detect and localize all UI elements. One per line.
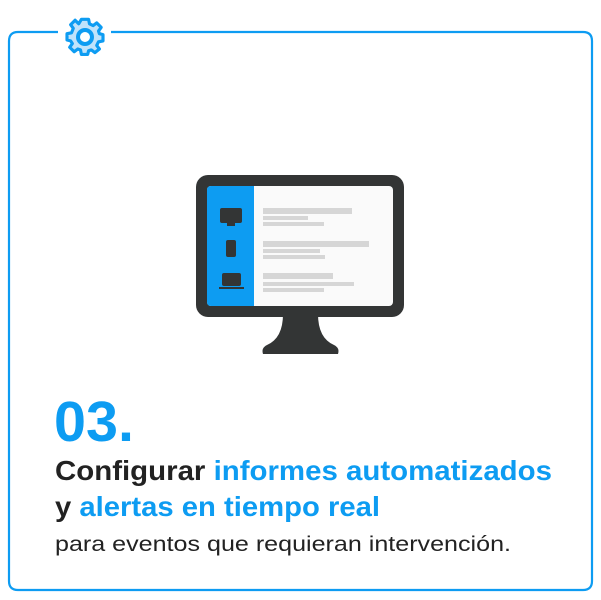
sidebar	[207, 186, 254, 306]
monitor stand	[262, 314, 338, 354]
number heading: 03.	[54, 390, 134, 454]
icon: monitor	[196, 175, 404, 354]
monitor frame	[196, 175, 404, 317]
sidebar icon: desktop	[220, 208, 242, 226]
description: para eventos que requieran intervención.	[55, 533, 511, 556]
title line 2: y alertas en tiempo real	[55, 491, 380, 522]
icon: gear	[67, 19, 103, 54]
title line 1: Configurar informes automatizados	[55, 455, 552, 486]
content lines	[263, 208, 369, 292]
sidebar icon: phone	[226, 240, 236, 257]
sidebar icon: laptop	[219, 273, 244, 289]
screen	[207, 186, 393, 306]
